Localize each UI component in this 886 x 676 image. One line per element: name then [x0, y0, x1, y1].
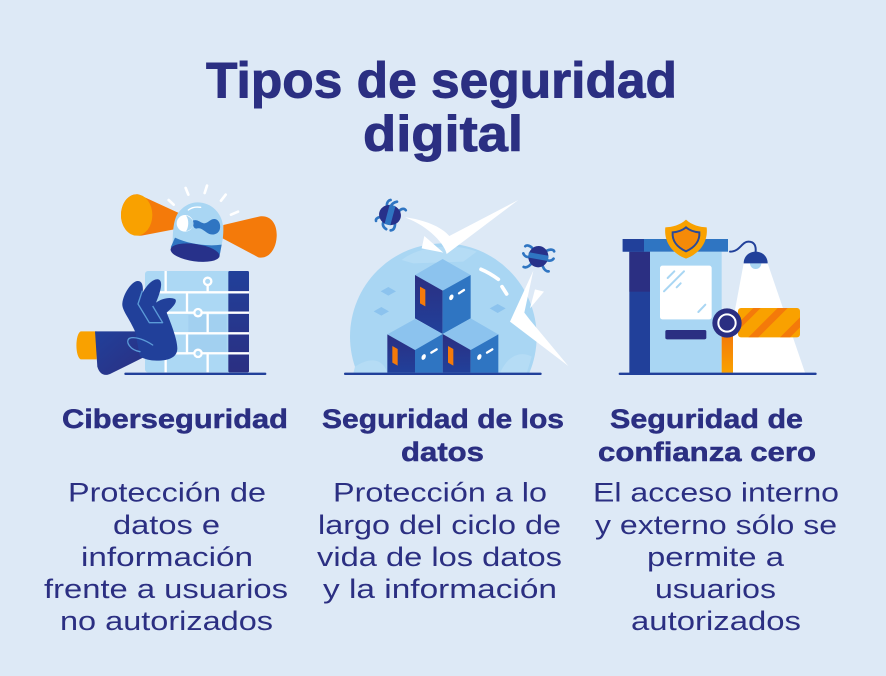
heading: Seguridad de los datos: [322, 404, 564, 467]
barrier: [712, 308, 800, 373]
text block: seguridad de los datos description: Protección a lo: [333, 478, 547, 508]
text block: ciberseguridad description: no autorizados: [60, 606, 273, 636]
text block: ciberseguridad description: datos e: [113, 510, 220, 540]
text block: confianza cero description: permite a: [647, 542, 785, 572]
heading: Seguridad de confianza cero: confianza cero: [598, 437, 816, 467]
text block: confianza cero description: El acceso interno: [593, 478, 839, 508]
lamp: [730, 242, 768, 269]
glass highlights: [481, 269, 507, 294]
alarm light: [121, 194, 277, 265]
text block: confianza cero description: usuarios: [655, 574, 776, 604]
heading: Seguridad de los datos: datos: [401, 437, 484, 467]
cube top: [415, 259, 471, 334]
door: [623, 239, 728, 373]
text block: ciberseguridad description: [44, 478, 288, 636]
ground line: [619, 373, 817, 375]
cube left: [387, 319, 443, 373]
text block: seguridad de los datos description: y la información: [323, 574, 557, 604]
title: Tipos de seguridad: [206, 52, 677, 108]
hand: [76, 279, 177, 375]
heading: Seguridad de los datos: Seguridad de los: [322, 404, 564, 434]
lamp light beam: [723, 263, 805, 373]
text block: confianza cero description: autorizados: [631, 606, 801, 636]
text block: confianza cero description: [593, 478, 839, 636]
heading: Seguridad de confianza cero: Seguridad de: [610, 404, 803, 434]
icon: data cubes protected from bugs: [344, 198, 568, 375]
ground line: [124, 373, 266, 375]
text block: ciberseguridad description: frente a usuarios: [44, 574, 288, 604]
dome: [350, 244, 536, 373]
text block: seguridad de los datos description: vida de los datos: [317, 542, 562, 572]
text block: ciberseguridad description: Protección de: [68, 478, 266, 508]
bug right: [521, 243, 555, 272]
deflection mark top: [405, 200, 518, 254]
ground line: [344, 373, 542, 375]
alarm rays: [169, 186, 238, 215]
cube right: [443, 318, 498, 373]
text block: seguridad de los datos description: [317, 478, 562, 604]
title: digital: [363, 106, 523, 162]
diamonds: [374, 287, 506, 316]
title: [206, 52, 677, 162]
heading: Ciberseguridad: Ciberseguridad: [62, 404, 288, 434]
icon: firewall with alarm and hand: [76, 186, 277, 375]
text block: seguridad de los datos description: largo del ciclo de: [318, 510, 561, 540]
brick wall: [145, 271, 249, 372]
heading: Seguridad de confianza cero: [598, 404, 816, 467]
icon: zero trust door with barrier: [619, 220, 817, 375]
shield: [665, 220, 707, 259]
text block: ciberseguridad description: información: [81, 542, 253, 572]
text block: confianza cero description: y externo sólo se: [595, 510, 837, 540]
deflection mark right: [510, 271, 568, 366]
bug left: [374, 198, 407, 233]
